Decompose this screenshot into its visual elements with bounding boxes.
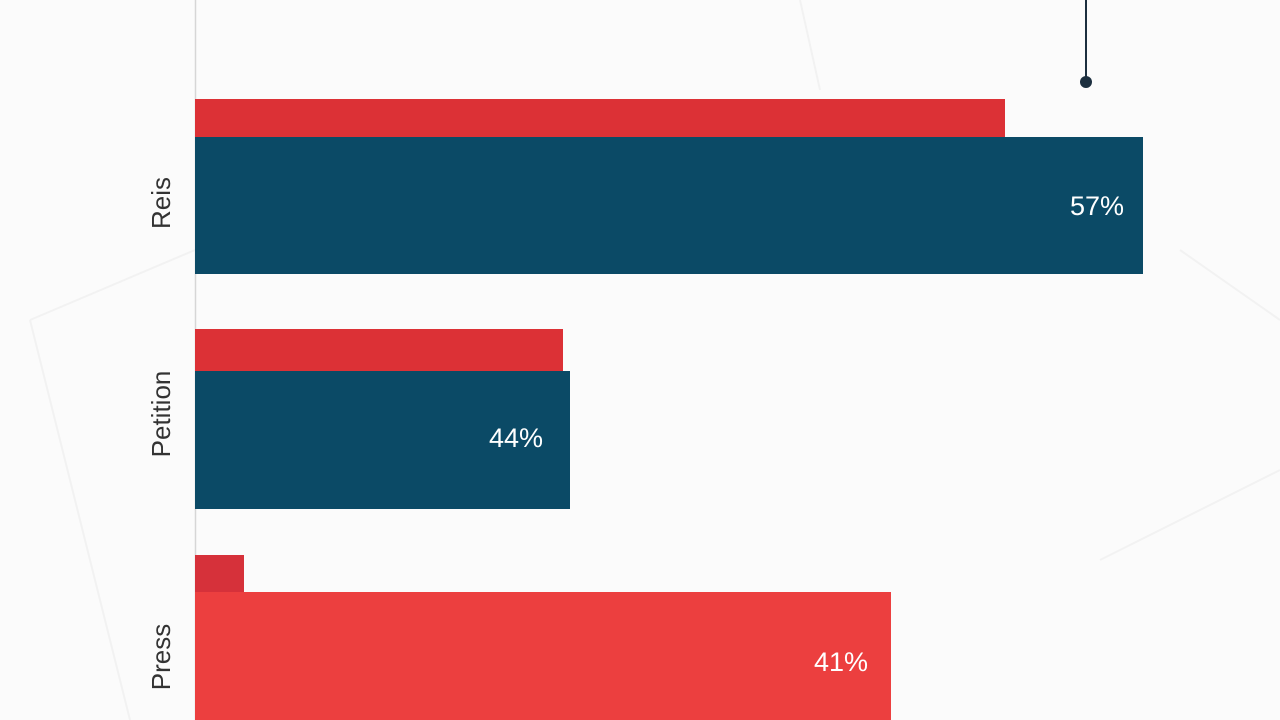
bar group: Petition: 44% — [489, 423, 543, 453]
label: Petition: Petition — [146, 371, 176, 457]
label: Reis: Reis — [146, 177, 176, 229]
bar group: Reis — [195, 99, 1143, 274]
bar group: Reis: 57% — [1070, 191, 1124, 221]
bar group: Press — [195, 555, 891, 720]
label: Press: Press — [146, 624, 176, 690]
bar group: Petition — [195, 329, 570, 509]
marker pin — [1080, 0, 1092, 88]
bar group: Press: 41% — [814, 647, 868, 677]
